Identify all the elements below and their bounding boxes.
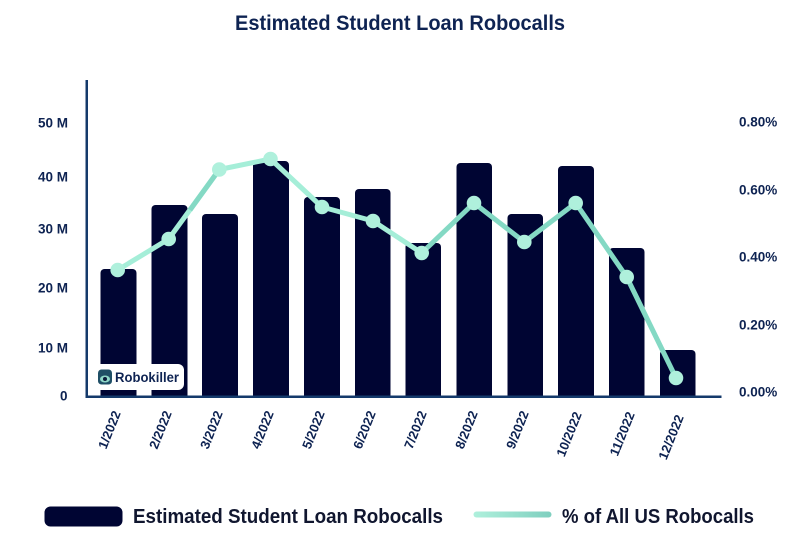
month labels: 7/2022 [401, 409, 430, 451]
month labels: 11/2022 [607, 410, 638, 458]
month labels [95, 409, 687, 462]
line series: % of all US robocalls [110, 152, 683, 385]
logo: Robokiller [92, 364, 184, 390]
month labels: 12/2022 [655, 413, 687, 462]
right axis labels: 0.20% [739, 318, 777, 332]
left axis labels: 30 M [38, 222, 68, 236]
left axis labels: 50 M [38, 116, 68, 130]
left axis labels: 20 M [38, 280, 68, 296]
month labels: 6/2022 [350, 409, 379, 451]
month labels: 4/2022 [248, 409, 277, 451]
right axis labels: 0.60% [739, 182, 777, 198]
month labels: 10/2022 [553, 410, 585, 459]
month labels: 1/2022 [95, 409, 124, 451]
legend label: line: % of All US Robocalls [562, 506, 754, 528]
month labels: 3/2022 [197, 409, 226, 451]
right axis labels: 0.80% [739, 114, 777, 130]
right axis labels: 0.00% [739, 384, 777, 400]
right axis labels [739, 114, 777, 400]
month labels: 2/2022 [146, 409, 175, 451]
axes [86, 80, 722, 398]
legend swatch: line [474, 512, 552, 518]
left axis labels [38, 116, 68, 404]
bar chart [100, 161, 696, 396]
month labels: 9/2022 [503, 409, 532, 451]
legend label: bars: Estimated Student Loan Robocalls [133, 506, 443, 528]
month labels: 8/2022 [452, 409, 481, 451]
left axis labels: 40 M [38, 170, 68, 184]
title: Estimated Student Loan Robocalls [235, 12, 565, 35]
logo: Robokiller: Robokiller [115, 370, 180, 385]
icon: robot [98, 370, 112, 384]
left axis labels: 0 [60, 388, 68, 404]
legend swatch: bars [44, 506, 122, 526]
month labels: 5/2022 [299, 409, 328, 451]
right axis labels: 0.40% [739, 250, 777, 264]
left axis labels: 10 M [38, 340, 68, 356]
